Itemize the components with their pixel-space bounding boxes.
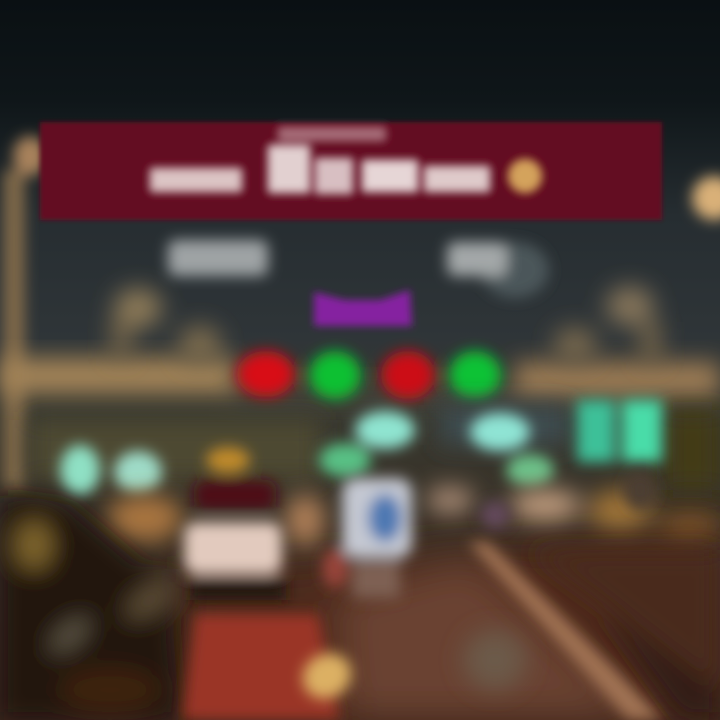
distant vehicle — [480, 470, 656, 529]
road surface — [180, 530, 720, 720]
gantry arms and lamps — [112, 286, 660, 365]
lower booth band — [30, 405, 720, 490]
road lamp reflection — [294, 644, 360, 708]
signal: red 2 — [381, 351, 435, 399]
gantry beam — [0, 358, 720, 404]
lane signal lights — [237, 351, 501, 399]
left foreground dark shapes — [0, 495, 180, 720]
panel: maroon banner — [40, 122, 662, 220]
red road reflection — [182, 614, 340, 720]
right street lamp — [692, 176, 720, 220]
car: white vehicle — [184, 447, 286, 600]
road lane marking — [468, 542, 665, 720]
icon: banner star — [508, 159, 542, 193]
right road dark lanes — [530, 550, 720, 720]
car: blue and white vehicle — [322, 478, 412, 598]
traffic haze — [107, 486, 720, 546]
teal lane lights — [60, 400, 662, 495]
signal: green 2 — [449, 351, 501, 399]
left pole — [3, 136, 47, 490]
purple sign — [314, 290, 412, 326]
grey sign right — [447, 242, 549, 298]
grey road patch — [463, 630, 527, 690]
banner text smudges — [150, 127, 490, 194]
grey sign left — [168, 240, 268, 276]
signal: red 1 — [237, 351, 295, 397]
signal: green 1 — [309, 351, 361, 399]
